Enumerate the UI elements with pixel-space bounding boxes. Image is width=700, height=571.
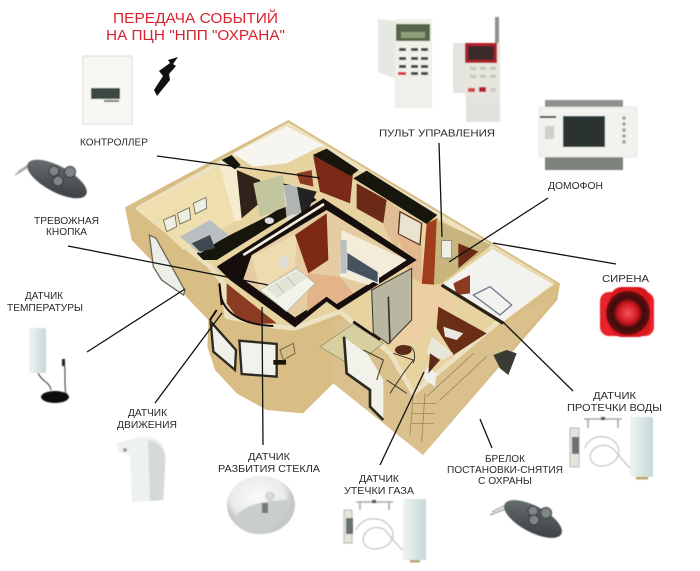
title: НА ПЦН "НПП "ОХРАНА"	[106, 27, 285, 44]
label: gas leak sensor	[344, 474, 414, 497]
icon: motion sensor	[117, 437, 166, 502]
label: glass break sensor: ДАТЧИК	[248, 452, 290, 463]
label: alarm button	[34, 216, 99, 238]
label: temperature sensor	[7, 291, 83, 314]
icon: controller box	[83, 56, 132, 124]
label: controller: КОНТРОЛЛЕР	[80, 138, 148, 148]
icon: temperature sensor	[29, 328, 69, 403]
label: water leak sensor	[567, 391, 662, 414]
label: disarm key fob: БРЕЛОК	[485, 454, 525, 465]
label: temperature sensor: ТЕМПЕРАТУРЫ	[7, 303, 83, 314]
label: motion sensor	[117, 408, 177, 431]
icon: alarm fob	[15, 152, 92, 206]
label: control panel: ПУЛЬТ УПРАВЛЕНИЯ	[379, 129, 495, 140]
leader lines	[68, 143, 616, 465]
label: gas leak sensor: ДАТЧИК	[359, 474, 399, 485]
icon: disarm key fob	[490, 492, 567, 546]
icon: lightning bolt	[154, 57, 178, 96]
label: water leak sensor: ПРОТЕЧКИ ВОДЫ	[567, 403, 662, 414]
label: motion sensor: ДВИЖЕНИЯ	[117, 420, 177, 431]
label: alarm button: ТРЕВОЖНАЯ	[34, 216, 99, 227]
title	[106, 9, 285, 44]
title: ПЕРЕДАЧА СОБЫТИЙ	[113, 9, 278, 27]
label: temperature sensor: ДАТЧИК	[25, 291, 63, 302]
illustration: apartment cutaway	[125, 120, 560, 455]
label: glass break sensor	[218, 452, 320, 475]
icon: keypad one	[378, 19, 432, 108]
icon: gas leak sensor	[344, 499, 426, 562]
label: siren: СИРЕНА	[602, 274, 649, 285]
sofa	[260, 268, 315, 312]
label: motion sensor: ДАТЧИК	[128, 408, 167, 419]
icon: keypad two with antenna	[453, 17, 500, 122]
icon: intercom	[539, 100, 637, 170]
label: water leak sensor: ДАТЧИК	[593, 391, 636, 402]
label: disarm key fob: ПОСТАНОВКИ-СНЯТИЯ	[447, 465, 563, 476]
label: disarm key fob	[447, 454, 563, 487]
label: disarm key fob: С ОХРАНЫ	[478, 476, 532, 487]
label: gas leak sensor: УТЕЧКИ ГАЗА	[344, 486, 414, 497]
label: alarm button: КНОПКА	[46, 227, 87, 238]
icon: siren	[600, 287, 654, 337]
icon: glass break sensor	[227, 476, 295, 534]
label: glass break sensor: РАЗБИТИЯ СТЕКЛА	[218, 464, 320, 475]
label: intercom: ДОМОФОН	[548, 181, 603, 192]
icon: water leak sensor	[570, 417, 653, 480]
